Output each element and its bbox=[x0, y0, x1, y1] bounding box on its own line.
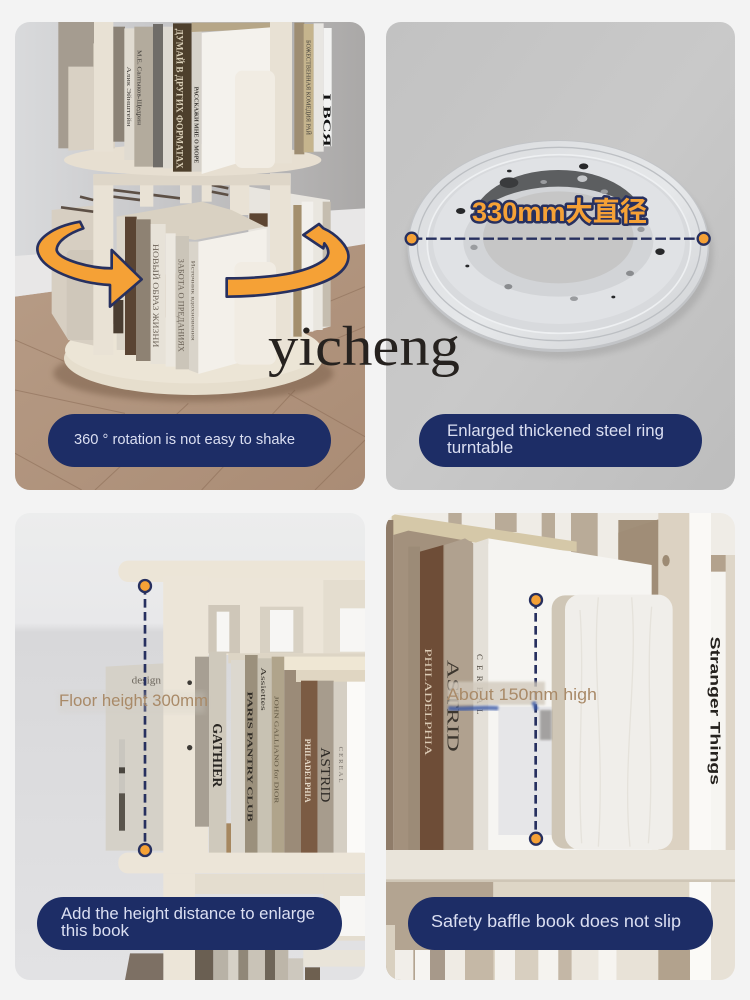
caption pill: height: Add the height distance to enlarge bbox=[61, 904, 315, 923]
height dashed line bbox=[530, 594, 542, 845]
panel: 360 rotation bbox=[15, 20, 365, 490]
book spine titles: ASTRID bbox=[318, 747, 333, 803]
book row bbox=[209, 652, 365, 856]
baffle height label: About 150mm high bbox=[447, 686, 597, 704]
backdrop bbox=[385, 510, 735, 980]
label smudge bbox=[58, 692, 205, 713]
inner opening bbox=[463, 170, 653, 297]
book spine titles: CEREAL bbox=[337, 747, 344, 785]
upper tier spine titles: Алик Эйнштейн bbox=[125, 67, 132, 128]
top shelf disc bbox=[118, 561, 372, 582]
watermark: yicheng bbox=[268, 316, 460, 378]
book spine titles: Assiettes bbox=[259, 667, 268, 711]
caption pill: baffle bbox=[408, 897, 713, 950]
cover lettering: design bbox=[132, 675, 162, 686]
book row bbox=[385, 520, 652, 850]
bookshelf photo with rotation arrows bbox=[15, 20, 365, 490]
lower tier books bbox=[113, 202, 267, 374]
floor bbox=[15, 244, 365, 490]
panel: floor height bbox=[15, 510, 372, 983]
rotation arrow right bbox=[227, 224, 348, 297]
base disc bbox=[64, 317, 323, 395]
spine titles: PHILADELPHIA bbox=[423, 648, 433, 756]
upper tier spine titles: БОЖЕСТВЕННАЯ КОМЕДИЯ РАЙ bbox=[304, 40, 312, 135]
upper tier spine titles: РАССКАЖИ МНЕ О МОРЕ bbox=[192, 87, 199, 164]
upper tier spine titles bbox=[125, 29, 331, 169]
caption pill: turntable: Enlarged thickened steel ring bbox=[447, 421, 664, 440]
book spine titles: PARIS PANTRY CLUB bbox=[246, 692, 255, 822]
caption pill: height: this book bbox=[61, 921, 130, 940]
lower tier spine titles: ЗАБОТА О ПРЕДАНИЯХ bbox=[176, 259, 185, 352]
floor shadow bbox=[52, 362, 334, 403]
baffle close-up photo bbox=[385, 510, 735, 980]
caption pill: baffle: Safety baffle book does not slip bbox=[431, 911, 681, 931]
side book block bbox=[106, 664, 164, 850]
middle shelf disc bbox=[64, 144, 321, 176]
upper tier spine titles: ДУМАЙ В ДРУГИХ ФОРМАТАХ bbox=[173, 29, 185, 169]
panel: steel ring turntable bbox=[385, 20, 735, 490]
lower tier pillars bbox=[93, 173, 291, 355]
wooden baffle bbox=[552, 595, 673, 850]
turntable photo bbox=[385, 20, 735, 490]
book spine titles: GATHIER bbox=[210, 723, 225, 788]
caption pill: rotation bbox=[48, 414, 331, 467]
lower tier rear books bbox=[52, 185, 331, 347]
upper tier spine titles: I ВСЯ bbox=[320, 93, 331, 148]
wall bbox=[15, 20, 365, 490]
inner pillar slot bbox=[195, 657, 209, 827]
caption pill: rotation: 360 ° rotation is not easy to shake bbox=[74, 431, 295, 448]
pillar holes bbox=[187, 680, 192, 750]
blue smudge bbox=[448, 702, 537, 710]
label smudge bbox=[448, 682, 545, 705]
upper tier spine titles: М.Е. Салтыков-Щедрин bbox=[136, 50, 143, 126]
panel: safety baffle bbox=[385, 510, 735, 980]
ring shadow bbox=[406, 214, 714, 359]
wall backdrop bbox=[15, 510, 365, 980]
rotation arrow left bbox=[37, 222, 142, 307]
caption pill: turntable bbox=[419, 414, 702, 467]
diameter label: 330mm大直径 bbox=[472, 197, 647, 227]
top book edge bbox=[392, 514, 577, 552]
spine titles: CEREAL bbox=[475, 654, 485, 720]
shelf close-up photo bbox=[15, 510, 372, 983]
upper baffle bbox=[235, 71, 275, 168]
pillar bbox=[164, 605, 208, 852]
upper tier pillars bbox=[94, 22, 292, 150]
lower shelf structure bbox=[385, 882, 735, 980]
lower tier spine titles bbox=[151, 244, 195, 352]
book spine titles bbox=[210, 667, 344, 822]
spine titles: ASTRID bbox=[444, 660, 463, 752]
upper tier books bbox=[113, 23, 332, 174]
back book bbox=[618, 519, 658, 610]
caption pill: height bbox=[37, 897, 342, 950]
book spine titles: JOHN GALLIANO for DIOR bbox=[272, 696, 279, 803]
lower shelf structure bbox=[125, 873, 365, 983]
side book title: Stranger Things bbox=[707, 637, 723, 785]
upper tier back block bbox=[58, 20, 115, 151]
floor height label: Floor height 300mm bbox=[59, 692, 208, 710]
lower tier spine titles: Источник вдохновения bbox=[190, 261, 195, 342]
back window frames bbox=[208, 581, 365, 655]
height dashed line bbox=[139, 580, 151, 856]
lower tier spine titles: НОВЫЙ ОБРАЗ ЖИЗНИ bbox=[151, 244, 160, 348]
middle shelf disc bbox=[118, 853, 372, 873]
book spine titles: PHILADELPHIA bbox=[303, 739, 312, 803]
right pillar bbox=[658, 512, 735, 852]
back slats bbox=[448, 512, 658, 607]
steel ring bbox=[407, 140, 709, 352]
diameter dashed line bbox=[406, 233, 710, 245]
caption pill: turntable: turntable bbox=[447, 438, 513, 457]
mounting holes bbox=[456, 163, 665, 301]
lower baffle bbox=[234, 262, 276, 365]
shelf board bbox=[385, 850, 735, 882]
spine titles bbox=[423, 648, 485, 756]
skirting boards bbox=[15, 208, 365, 297]
grey background bbox=[385, 20, 735, 490]
dark gap shadow bbox=[540, 710, 552, 740]
